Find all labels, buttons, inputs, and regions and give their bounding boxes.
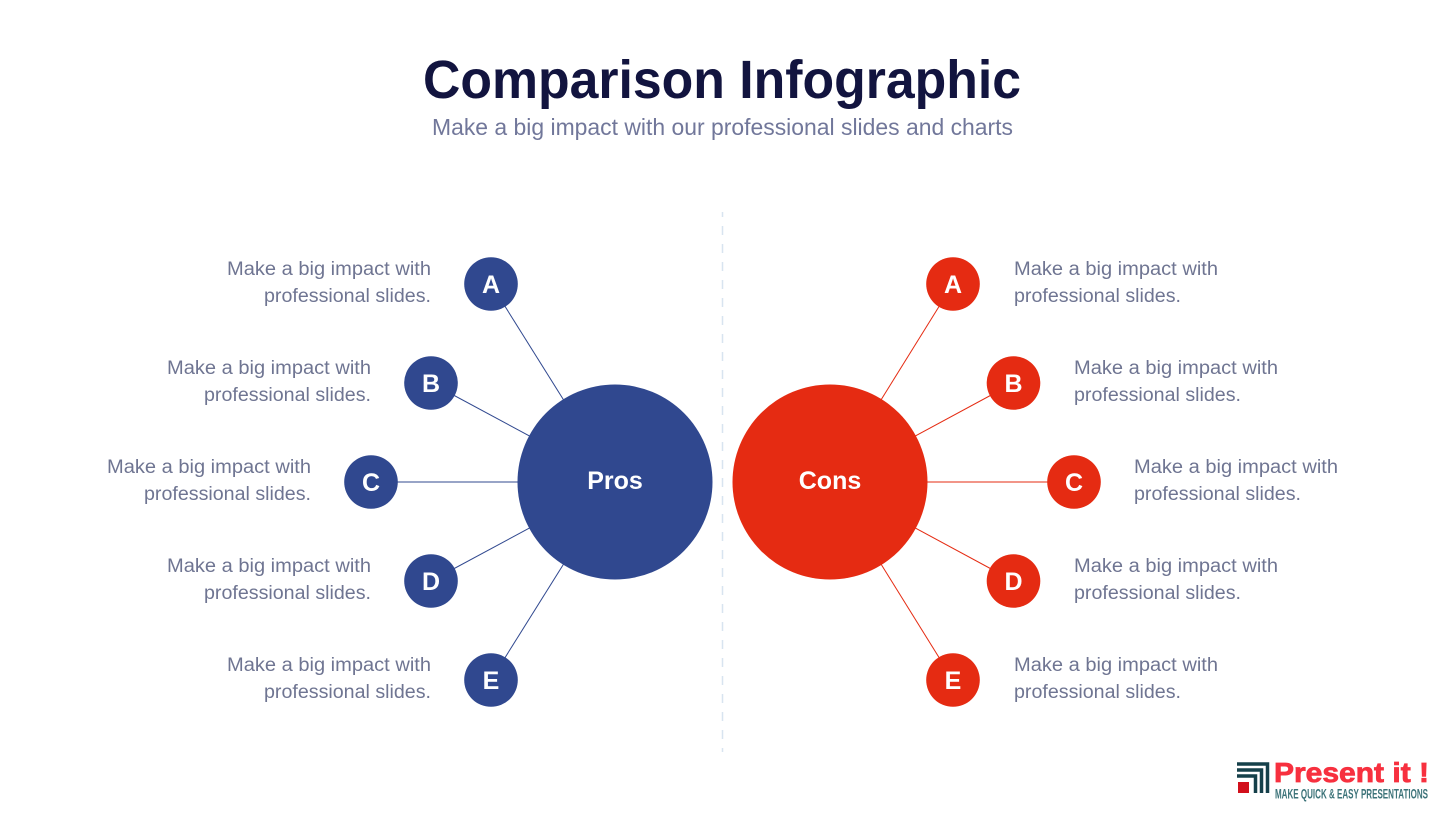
- panel: pros: [107, 257, 712, 707]
- connector lines: cons: [830, 284, 1074, 680]
- cons item E: professional slides.: [1014, 682, 1181, 703]
- pros item E: [227, 653, 518, 707]
- pros item D: Make a big impact with: [167, 556, 371, 577]
- cons item A: professional slides.: [1014, 286, 1181, 307]
- connector lines: pros: [371, 284, 615, 680]
- pros item B: B: [422, 370, 440, 398]
- pros item D: D: [422, 568, 440, 596]
- cons item D: [987, 554, 1278, 608]
- cons item A: A: [944, 271, 962, 299]
- pros item D: [167, 554, 458, 608]
- cons item B: Make a big impact with: [1074, 358, 1278, 379]
- logo: Present it: [1237, 757, 1429, 802]
- pros item B: [167, 356, 458, 410]
- pros hub circle: [518, 384, 712, 580]
- cons item B: B: [1004, 370, 1023, 398]
- cons item C: professional slides.: [1134, 484, 1301, 505]
- icon: logo mark: [1237, 764, 1268, 793]
- cons item B: professional slides.: [1074, 385, 1241, 406]
- logo wordmark: Present it !: [1274, 757, 1429, 788]
- pros item A: [227, 257, 518, 311]
- cons item B: [987, 356, 1278, 410]
- cons item C: [1047, 455, 1338, 509]
- cons item E: [926, 653, 1218, 707]
- pros item E: E: [483, 667, 499, 695]
- title: Comparison Infographic: [423, 50, 1021, 110]
- pros item C: professional slides.: [144, 484, 311, 505]
- cons item C: Make a big impact with: [1134, 457, 1338, 478]
- pros hub circle: Pros: [587, 467, 643, 495]
- pros item C: Make a big impact with: [107, 457, 311, 478]
- pros item C: [107, 455, 398, 509]
- pros item A: Make a big impact with: [227, 259, 431, 280]
- pros item A: A: [482, 271, 500, 299]
- pros item B: Make a big impact with: [167, 358, 371, 379]
- cons item D: professional slides.: [1074, 583, 1241, 604]
- pros item A: professional slides.: [264, 286, 431, 307]
- pros item D: professional slides.: [204, 583, 371, 604]
- pros item B: professional slides.: [204, 385, 371, 406]
- cons item D: Make a big impact with: [1074, 556, 1278, 577]
- pros item E: professional slides.: [264, 682, 431, 703]
- panel: cons: [732, 257, 1338, 707]
- cons hub circle: [732, 384, 928, 580]
- pros item E: Make a big impact with: [227, 655, 431, 676]
- cons item E: E: [945, 667, 961, 695]
- cons item A: [926, 257, 1218, 311]
- subtitle: Make a big impact with our professional slides and charts: [432, 114, 1013, 140]
- cons item D: D: [1004, 568, 1023, 596]
- cons hub circle: Cons: [799, 467, 861, 495]
- cons item A: Make a big impact with: [1014, 259, 1218, 280]
- cons item C: C: [1065, 469, 1083, 497]
- pros item C: C: [362, 469, 380, 497]
- cons item E: Make a big impact with: [1014, 655, 1218, 676]
